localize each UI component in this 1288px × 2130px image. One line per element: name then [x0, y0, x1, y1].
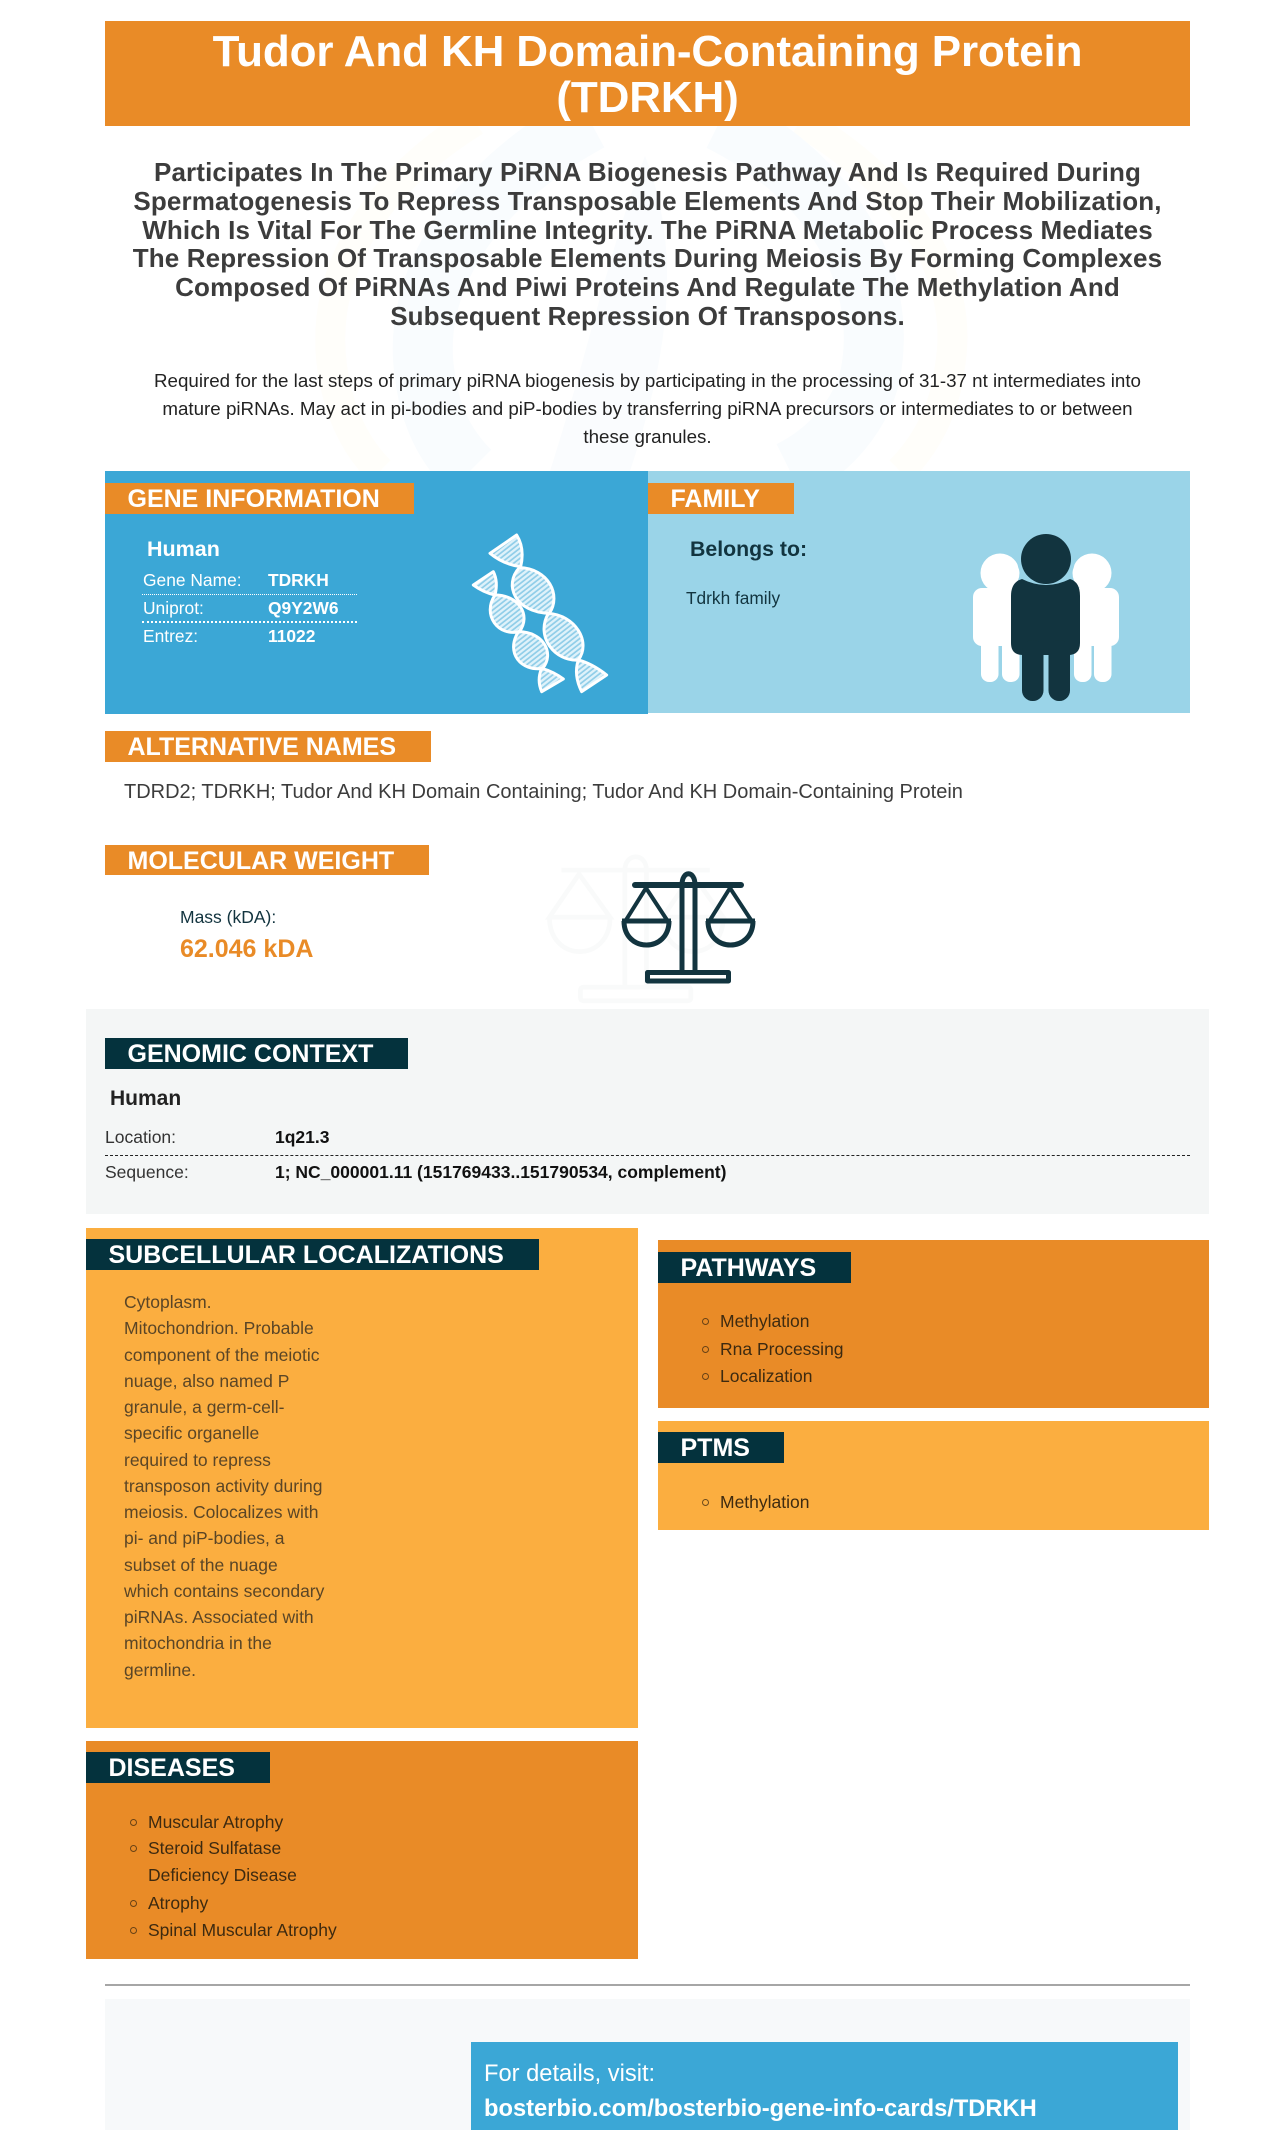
localization text: which contains secondary	[124, 1581, 324, 1601]
localization text: meiosis. Colocalizes with	[124, 1502, 319, 1522]
icon: ghost scale watermark	[540, 848, 730, 1008]
icon: DNA helices	[472, 533, 608, 694]
diseases list: Spinal Muscular Atrophy	[148, 1920, 337, 1940]
family name: Tdrkh family	[686, 588, 780, 608]
diseases list	[130, 1812, 337, 1940]
gene name row: Gene Name:	[143, 570, 242, 590]
subtitle summary: Participates In The Primary PiRNA Biogenesis Pathway And Is Required During	[154, 157, 1141, 187]
localization text	[124, 1292, 324, 1680]
heading: diseases: DISEASES	[108, 1754, 235, 1782]
subtitle summary	[133, 157, 1162, 331]
pathways list: Methylation	[720, 1311, 810, 1331]
heading: family	[648, 483, 794, 514]
PTMs list: Methylation	[720, 1492, 810, 1512]
location row: Location:	[105, 1127, 176, 1147]
heading: pathways: PATHWAYS	[680, 1254, 816, 1282]
species label: Human	[147, 537, 220, 561]
sequence row: 1; NC_000001.11 (151769433..151790534, complement)	[275, 1162, 726, 1182]
description paragraph	[154, 370, 1141, 447]
entrez row: Entrez:	[143, 626, 198, 646]
localization text: subset of the nuage	[124, 1554, 278, 1574]
pathways list: Localization	[720, 1366, 812, 1386]
panel: diseases	[86, 1741, 638, 1959]
heading: pathways	[658, 1252, 851, 1283]
subtitle summary: Subsequent Repression Of Transposons.	[390, 301, 905, 331]
panel: PTMs	[658, 1421, 1209, 1530]
localization text: required to repress	[124, 1450, 271, 1470]
heading: subcellular localizations: SUBCELLULAR LOCALIZATIONS	[108, 1241, 504, 1269]
panel: subcellular localizations	[86, 1228, 638, 1728]
pathways list	[702, 1311, 844, 1386]
localization text: Cytoplasm.	[124, 1292, 212, 1312]
panel: pathways	[658, 1240, 1209, 1408]
diseases list: Steroid Sulfatase	[148, 1838, 281, 1858]
subtitle summary: Composed Of PiRNAs And Piwi Proteins And Regulate The Methylation And	[175, 272, 1120, 302]
panel: genomic context	[86, 1009, 1209, 1214]
background watermark logo	[300, 126, 1000, 471]
icon: balance scale	[622, 871, 756, 984]
heading: PTMs	[658, 1432, 784, 1463]
uniprot row: Uniprot:	[143, 598, 204, 618]
alternative names text: TDRD2; TDRKH; Tudor And KH Domain Containing; Tudor And KH Domain-Containing Protein	[124, 781, 963, 803]
localization text: Mitochondrion. Probable	[124, 1318, 314, 1338]
heading: molecular weight: MOLECULAR WEIGHT	[128, 847, 394, 875]
description paragraph: mature piRNAs. May act in pi-bodies and piP-bodies by transferring piRNA precursors or intermediates to or between	[162, 398, 1133, 419]
title banner: (TDRKH)	[556, 73, 739, 122]
callout: details link	[471, 2042, 1178, 2130]
description paragraph: Required for the last steps of primary piRNA biogenesis by participating in the processing of 31-37 nt intermediates into	[154, 370, 1141, 391]
gene name row	[143, 570, 329, 590]
diseases list: Muscular Atrophy	[148, 1812, 283, 1832]
title banner	[105, 21, 1190, 126]
belongs to label: Belongs to:	[690, 537, 807, 561]
callout: details link: For details, visit:	[484, 2061, 655, 2087]
panel: family	[648, 471, 1190, 713]
uniprot row	[143, 598, 339, 618]
heading: diseases	[86, 1752, 270, 1783]
localization text: piRNAs. Associated with	[124, 1607, 314, 1627]
heading: PTMs: PTMS	[680, 1434, 750, 1462]
mass label: Mass (kDA):	[180, 907, 276, 927]
title banner: Tudor And KH Domain-Containing Protein	[213, 27, 1082, 76]
sequence row: Sequence:	[105, 1162, 189, 1182]
diseases list: Atrophy	[148, 1893, 208, 1913]
localization text: transposon activity during	[124, 1476, 322, 1496]
heading: gene information: GENE INFORMATION	[128, 485, 380, 513]
species label: Human	[110, 1087, 181, 1110]
localization text: pi- and piP-bodies, a	[124, 1528, 285, 1548]
mass value: 62.046 kDA	[180, 935, 313, 963]
localization text: specific organelle	[124, 1423, 259, 1443]
panel: gene information	[105, 471, 648, 714]
subtitle summary: Which Is Vital For The Germline Integrity. The PiRNA Metabolic Process Mediates	[142, 215, 1153, 245]
subtitle summary: Spermatogenesis To Repress Transposable Elements And Stop Their Mobilization,	[133, 186, 1162, 216]
uniprot row: Q9Y2W6	[268, 598, 339, 618]
localization text: mitochondria in the	[124, 1633, 272, 1653]
panel: footer	[105, 1999, 1190, 2130]
callout: details link: bosterbio.com/bosterbio-gene-info-cards/TDRKH	[484, 2096, 1037, 2122]
entrez row	[143, 626, 315, 646]
diseases list: Deficiency Disease	[148, 1865, 297, 1885]
localization text: granule, a germ-cell-	[124, 1397, 284, 1417]
localization text: component of the meiotic	[124, 1344, 320, 1364]
localization text: germline.	[124, 1660, 196, 1680]
pathways list: Rna Processing	[720, 1339, 844, 1359]
heading: genomic context: GENOMIC CONTEXT	[128, 1040, 373, 1068]
heading: family: FAMILY	[670, 485, 760, 513]
localization text: nuage, also named P	[124, 1371, 289, 1391]
description paragraph: these granules.	[583, 426, 712, 447]
gene name row: TDRKH	[268, 570, 329, 590]
location row: 1q21.3	[275, 1127, 329, 1147]
entrez row: 11022	[268, 626, 315, 646]
icon: people group	[973, 534, 1119, 701]
subtitle summary: The Repression Of Transposable Elements During Meiosis By Forming Complexes	[133, 243, 1162, 273]
location row	[105, 1127, 329, 1147]
heading: alternative names: ALTERNATIVE NAMES	[128, 733, 396, 761]
